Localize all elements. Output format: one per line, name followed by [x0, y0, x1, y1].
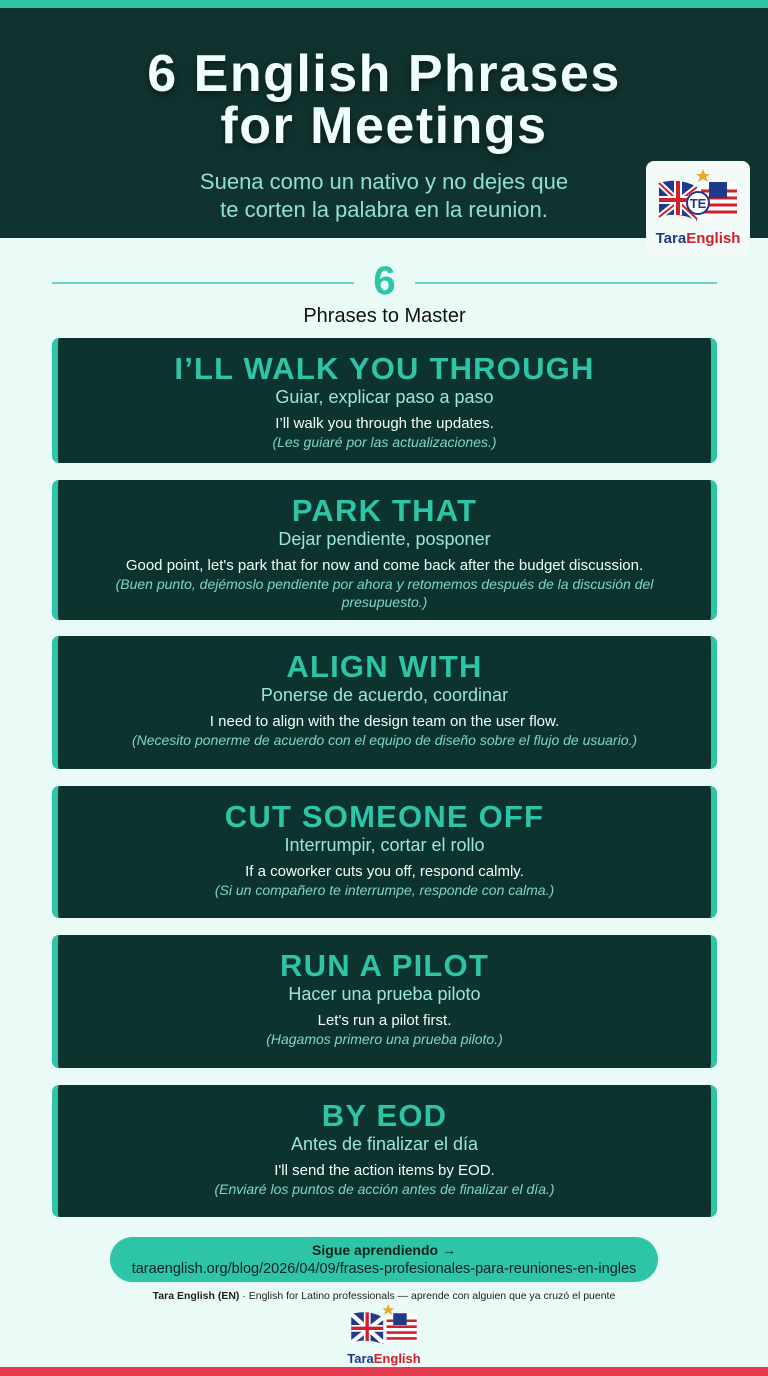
big number: 6 [373, 259, 396, 303]
card: cut someone off: CUT SOMEONE OFF [225, 799, 544, 834]
footer link pill: taraenglish.org/blog/2026/04/09/frases-profesionales-para-reuniones-en-ingles [132, 1261, 636, 1277]
icon: book flags [657, 169, 737, 221]
subtitle: Suena como un nativo y no dejes que [200, 169, 568, 194]
card: I'll walk you through: (Les guiaré por las actualizaciones.) [272, 434, 497, 450]
card: I'll walk you through: I’ll walk you through the updates. [275, 415, 494, 432]
card: by EOD: I'll send the action items by EOD. [274, 1162, 495, 1179]
card: cut someone off [52, 786, 717, 918]
card: align with: Ponerse de acuerdo, coordinar [261, 685, 508, 705]
card: run a pilot: Let's run a pilot first. [318, 1012, 451, 1029]
card: align with: ALIGN WITH [286, 649, 483, 684]
header panel [0, 8, 768, 238]
bottom accent bar [0, 1367, 768, 1376]
logo wordmark: TaraEnglish [656, 230, 740, 247]
footer wordmark: TaraEnglish [347, 1351, 421, 1366]
card: cut someone off: If a coworker cuts you off, respond calmly. [245, 863, 524, 880]
card: cut someone off: (Si un compañero te interrumpe, responde con calma.) [215, 882, 554, 898]
card: cut someone off: Interrumpir, cortar el rollo [284, 835, 485, 855]
title [147, 45, 621, 158]
card: park that: (Buen punto, dejémoslo pendiente por ahora y retomemos después de la discusión del presupuesto.) [116, 576, 653, 610]
card: I'll walk you through: Guiar, explicar paso a paso [275, 387, 494, 407]
card: park that: PARK THAT [292, 493, 477, 528]
card: park that [52, 480, 717, 620]
card: by EOD: BY EOD [322, 1098, 447, 1133]
card: align with: (Necesito ponerme de acuerdo con el equipo de diseño sobre el flujo de usuario.) [132, 732, 637, 748]
card: I'll walk you through: I’LL WALK YOU THROUGH [174, 351, 595, 386]
footer link pill: Sigue aprendiendo → [312, 1242, 456, 1258]
logo badge [646, 161, 750, 255]
top accent bar [0, 0, 768, 8]
card: align with: I need to align with the design team on the user flow. [210, 713, 559, 730]
card: run a pilot: (Hagamos primero una prueba piloto.) [266, 1031, 503, 1047]
title: for Meetings [220, 97, 548, 155]
card: I'll walk you through [52, 338, 717, 463]
section divider heading [52, 259, 717, 327]
footer logo [347, 1304, 421, 1366]
card: park that: Dejar pendiente, posponer [278, 529, 491, 549]
subtitle: te corten la palabra en la reunion. [220, 197, 548, 222]
card: by EOD [52, 1085, 717, 1217]
section subtitle: Phrases to Master [303, 305, 466, 327]
card: run a pilot [52, 935, 717, 1068]
card: by EOD: Antes de finalizar el día [291, 1134, 478, 1154]
footer link pill [110, 1237, 658, 1282]
subtitle [200, 169, 568, 222]
card: align with [52, 636, 717, 769]
footer credit line: Tara English (EN) · English for Latino professionals — aprende con alguien que ya cruzó el puente [153, 1290, 615, 1302]
card: park that: Good point, let's park that for now and come back after the budget discussion. [126, 557, 643, 574]
card: run a pilot: Hacer una prueba piloto [288, 984, 481, 1004]
icon: book flags: TE [690, 196, 707, 211]
card: by EOD: (Enviaré los puntos de acción antes de finalizar el día.) [214, 1181, 555, 1197]
card: run a pilot: RUN A PILOT [280, 948, 489, 983]
title: 6 English Phrases [147, 45, 621, 103]
